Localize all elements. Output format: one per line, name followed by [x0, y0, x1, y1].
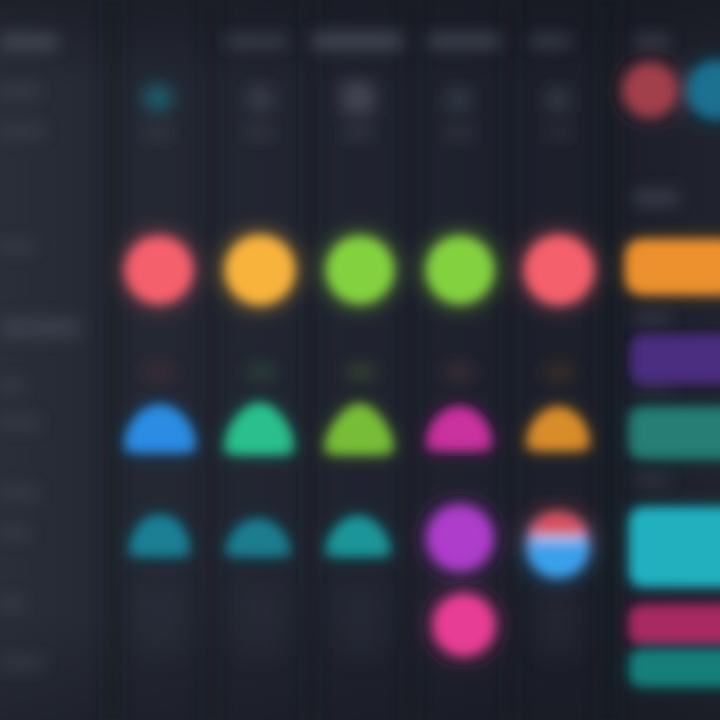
top row cells — [143, 82, 572, 138]
magenta bar — [632, 608, 720, 642]
lower column placeholders — [140, 585, 576, 655]
row of domes — [126, 405, 588, 452]
purple circle — [429, 507, 491, 569]
column dividers — [106, 0, 618, 720]
small markers above domes — [146, 364, 572, 380]
row of status circles — [127, 237, 592, 303]
header labels — [0, 32, 670, 50]
teal bar — [632, 652, 720, 684]
purple bar — [634, 338, 720, 380]
right section labels — [634, 190, 678, 484]
multicolour status circle — [529, 514, 587, 576]
top right icons — [625, 63, 720, 117]
orange bar — [628, 242, 720, 292]
cyan bar — [632, 510, 720, 584]
pink circle — [435, 596, 493, 654]
green bar — [632, 410, 720, 456]
row of teal domes — [130, 517, 390, 554]
left sidebar labels — [0, 86, 80, 668]
